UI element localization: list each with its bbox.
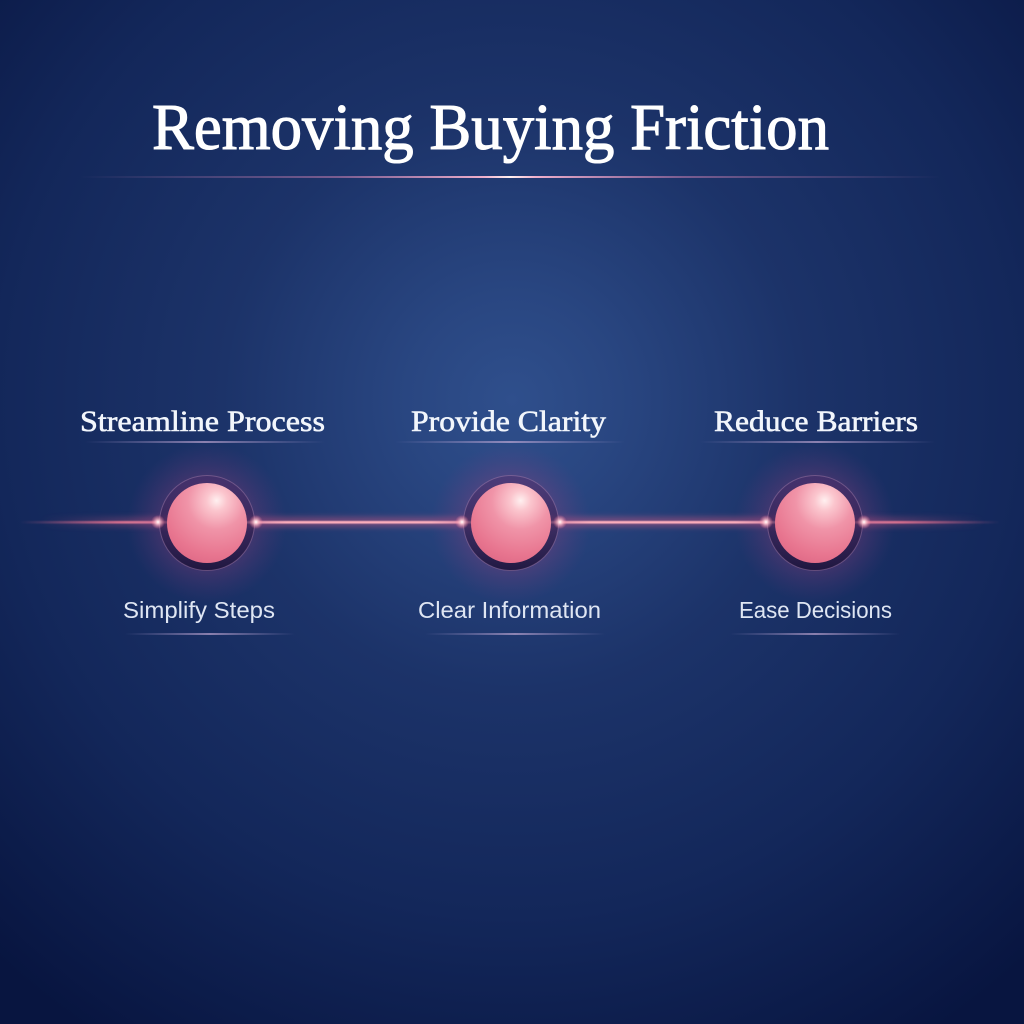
step 3: Reduce Barriers — [700, 405, 935, 635]
title: Removing Buying Friction — [152, 91, 829, 164]
label underline 1 — [125, 633, 295, 635]
heading: Streamline Process: Streamline Process — [80, 405, 325, 438]
label: Clear Information: Clear Information — [418, 597, 601, 623]
heading: Reduce Barriers: Reduce Barriers — [714, 405, 918, 438]
node 3 — [735, 443, 895, 603]
heading underline 3 — [700, 441, 935, 443]
node 1 — [127, 443, 287, 603]
label: Ease Decisions: Ease Decisions — [739, 597, 892, 623]
heading underline 1 — [85, 441, 325, 443]
node 2 — [431, 443, 591, 603]
heading: Provide Clarity: Provide Clarity — [411, 405, 606, 438]
title underline — [80, 176, 940, 178]
glowing connector line — [20, 517, 1000, 527]
heading underline 2 — [395, 441, 625, 443]
label: Simplify Steps: Simplify Steps — [123, 597, 275, 623]
label underline 2 — [425, 633, 605, 635]
label underline 3 — [730, 633, 900, 635]
step 2: Provide Clarity — [395, 405, 625, 635]
step 1: Streamline Process — [80, 405, 325, 635]
